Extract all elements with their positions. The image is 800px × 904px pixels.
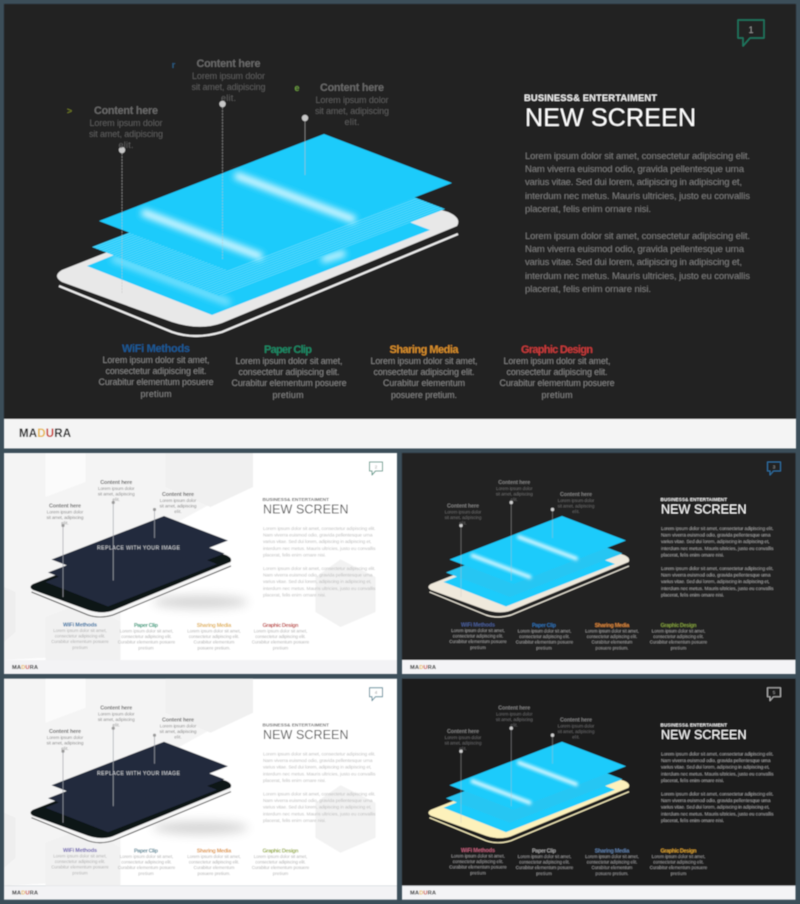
bottom labels: Lorem ipsum dolor sit amet,	[53, 628, 107, 633]
heading and paragraphs: placerat, felis enim ornare nisi.	[661, 778, 724, 784]
phone face	[57, 172, 458, 327]
bottom labels: posuere pretium.	[596, 646, 628, 650]
text block: paragraph 1: varius vitae. Sed dui lorem, adipiscing in adipiscing et,	[525, 177, 742, 188]
heading and paragraphs: interdum nec metus. Mauris ultricies, justo eu convallis	[263, 586, 376, 592]
callout: content here 1: Content here	[94, 105, 158, 117]
callout: content here 1: >	[67, 106, 72, 116]
bottom labels: Curabitur elementum posuere	[118, 865, 176, 870]
callouts: Content here	[560, 718, 592, 724]
phone edge highlight	[59, 234, 458, 336]
heading and paragraphs: placerat, felis enim ornare nisi.	[661, 818, 724, 824]
callout: content here 1: Lorem ipsum dolor	[90, 118, 162, 128]
heading and paragraphs: placerat, felis enim ornare nisi.	[263, 818, 326, 824]
callouts: elit.	[112, 497, 120, 502]
bottom labels: Lorem ipsum dolor sit amet,	[120, 628, 173, 634]
heading and paragraphs: NEW SCREEN	[661, 728, 746, 742]
bottom labels: Paper Clip	[134, 623, 159, 629]
heading and paragraphs: Nam viverra euismod odio, gravida pellentesque urna	[661, 798, 771, 804]
bottom labels: pretium	[138, 646, 154, 650]
bottom labels: Curabitur elementum	[194, 865, 235, 870]
heading and paragraphs: interdum nec metus. Mauris ultricies, justo eu convallis	[661, 546, 774, 552]
heading and paragraphs: NEW SCREEN	[661, 502, 746, 516]
panel: dark slide 5	[402, 679, 796, 900]
text block: paragraph 1: interdum nec metus. Mauris ultricies, justo eu convallis	[525, 191, 750, 202]
heading and paragraphs: placerat, felis enim ornare nisi.	[263, 592, 326, 598]
bottom labels	[51, 848, 310, 876]
heading and paragraphs: Nam viverra euismod odio, gravida pellentesque urna	[263, 572, 373, 578]
bottom labels: pretium	[536, 871, 552, 876]
label: WiFi Methods: Lorem ipsum dolor sit amet,	[102, 355, 210, 365]
heading and paragraphs: interdum nec metus. Mauris ultricies, justo eu convallis	[263, 772, 376, 778]
text block: paragraph 2: varius vitae. Sed dui lorem, adipiscing in adipiscing et,	[525, 257, 742, 268]
bottom labels: pretium	[138, 871, 154, 876]
bottom labels: Lorem ipsum dolor sit amet,	[585, 854, 639, 859]
callout: content here 2: Lorem ipsum dolor	[192, 71, 265, 81]
callout: content here 3: sit amet, adipiscing	[315, 106, 389, 116]
callouts: elit.	[459, 746, 467, 751]
label: Paper Clip: consectetur adipiscing elit.	[238, 367, 340, 377]
label: Graphic Design: consectetur adipiscing elit.	[506, 367, 608, 377]
bottom labels: WiFi Methods	[461, 622, 495, 628]
footer	[4, 886, 397, 900]
bottom labels: Lorem ipsum dolor sit amet,	[254, 628, 307, 634]
heading and paragraphs: interdum nec metus. Mauris ultricies, justo eu convallis	[263, 546, 376, 552]
bottom labels: pretium	[72, 645, 88, 650]
heading and paragraphs	[262, 723, 376, 824]
callouts: sit amet, adipiscing	[558, 729, 595, 734]
label: WiFi Methods: consectetur adipiscing elit.	[106, 366, 206, 376]
heading and paragraphs: Nam viverra euismod odio, gravida pellentesque urna	[661, 572, 771, 578]
icon: comment bubble: 3	[773, 464, 776, 470]
bottom labels: consectetur adipiscing elit.	[255, 634, 306, 639]
text block: paragraph 2	[525, 231, 750, 295]
heading and paragraphs	[660, 497, 774, 598]
heading and paragraphs	[660, 723, 774, 824]
label: Paper Clip: Paper Clip	[264, 344, 312, 356]
heading and paragraphs: Nam viverra euismod odio, gravida pellentesque urna	[661, 532, 771, 538]
icon: comment bubble with number	[738, 20, 764, 46]
icon: comment bubble: 2	[375, 464, 378, 470]
text block: paragraph 2: Lorem ipsum dolor sit amet, consectetur adipiscing elit.	[525, 231, 750, 242]
bottom labels: consectetur adipiscing elit.	[653, 634, 704, 639]
text block: paragraph 1: Nam viverra euismod odio, gravida pellentesque urna	[525, 164, 745, 175]
label: WiFi Methods: WiFi Methods	[122, 343, 190, 355]
callouts: Content here	[447, 729, 479, 735]
bottom labels	[449, 848, 708, 876]
callouts: Content here	[49, 504, 81, 510]
callouts: Content here	[100, 706, 132, 712]
phone illustration	[428, 742, 629, 843]
text block: paragraph 1: Lorem ipsum dolor sit amet, consectetur adipiscing elit.	[525, 151, 750, 162]
bottom labels: Curabitur elementum posuere	[51, 639, 109, 644]
callout: content here 1: sit amet, adipiscing	[89, 129, 163, 139]
callouts: sit amet, adipiscing	[46, 515, 84, 520]
label: Paper Clip: Lorem ipsum dolor sit amet,	[236, 356, 342, 366]
icon: comment bubble: 5	[773, 690, 776, 695]
callouts: sit amet, adipiscing	[98, 492, 135, 496]
heading and paragraphs: varius vitae. Sed dui lorem, adipiscing in adipiscing et,	[661, 765, 770, 771]
callout: content here 2: r	[172, 60, 176, 70]
background hexagons	[4, 679, 376, 886]
bottom labels: consectetur adipiscing elit.	[453, 859, 503, 864]
heading and paragraphs: Lorem ipsum dolor sit amet, consectetur adipiscing elit.	[661, 752, 774, 758]
heading and paragraphs: interdum nec metus. Mauris ultricies, justo eu convallis	[263, 812, 376, 818]
bottom labels: Curabitur elementum posuere	[51, 865, 109, 870]
callouts: Content here	[560, 492, 592, 498]
bottom labels	[51, 622, 310, 650]
bottom labels: WiFi Methods	[63, 848, 97, 854]
callouts: Content here	[447, 504, 479, 510]
panel: dark slide 3	[402, 453, 796, 674]
callouts: sit amet, adipiscing	[444, 741, 482, 746]
callouts: sit amet, adipiscing	[98, 717, 135, 722]
heading and paragraphs: varius vitae. Sed dui lorem, adipiscing in adipiscing et,	[263, 579, 372, 585]
bottom labels: Lorem ipsum dolor sit amet,	[53, 854, 107, 859]
footer	[402, 660, 796, 674]
footer: MADURA	[410, 665, 436, 671]
label: Paper Clip	[232, 344, 347, 400]
callouts: Lorem ipsum dolor	[496, 486, 533, 491]
label: Sharing Media: Lorem ipsum dolor sit amet,	[370, 356, 478, 366]
heading and paragraphs: placerat, felis enim ornare nisi.	[661, 592, 724, 598]
heading and paragraphs: Nam viverra euismod odio, gravida pellentesque urna	[263, 758, 373, 764]
bottom labels: Curabitur elementum posuere	[252, 640, 310, 644]
heading and paragraphs: varius vitae. Sed dui lorem, adipiscing in adipiscing et,	[263, 539, 372, 545]
bottom labels: Graphic Design	[660, 623, 697, 629]
bottom labels: Paper Clip	[134, 849, 159, 855]
bottom labels: pretium	[273, 871, 289, 876]
callouts: sit amet, adipiscing	[496, 717, 533, 722]
footer: MADURA	[410, 891, 436, 897]
callouts: elit.	[459, 520, 467, 526]
bottom labels: posuere pretium.	[198, 646, 230, 650]
phone shadow	[153, 821, 248, 834]
heading: BUSINESS& ENTERTAIMENT	[524, 92, 657, 103]
label: Graphic Design	[500, 344, 615, 400]
label: Paper Clip: pretium	[272, 390, 304, 400]
bottom labels: WiFi Methods	[461, 848, 495, 854]
bottom labels: Lorem ipsum dolor sit amet,	[451, 854, 505, 859]
bottom labels: Sharing Media	[197, 623, 232, 629]
callouts: elit.	[112, 723, 120, 728]
callouts: sit amet, adipiscing	[160, 504, 197, 508]
callouts: elit.	[510, 497, 518, 502]
bottom labels: Sharing Media	[197, 849, 232, 855]
label: Sharing Media: Sharing Media	[390, 344, 459, 356]
phone illustration: REPLACE WITH YOUR IMAGE	[97, 546, 180, 552]
callouts: Lorem ipsum dolor	[558, 724, 595, 729]
heading and paragraphs: placerat, felis enim ornare nisi.	[661, 552, 724, 558]
heading and paragraphs: Nam viverra euismod odio, gravida pellentesque urna	[263, 798, 373, 804]
callouts	[46, 706, 197, 823]
panel: light slide 4	[4, 679, 397, 900]
callouts: Content here	[162, 718, 194, 724]
bottom labels: Lorem ipsum dolor sit amet,	[652, 628, 705, 634]
phone illustration	[428, 516, 629, 617]
callouts: sit amet, adipiscing	[558, 504, 595, 508]
icon: comment bubble	[768, 462, 780, 475]
bottom labels: Curabitur elementum posuere	[252, 865, 310, 870]
callouts: elit.	[510, 723, 518, 728]
heading and paragraphs: BUSINESS& ENTERTAIMENT	[262, 723, 329, 728]
bottom labels: Lorem ipsum dolor sit amet,	[585, 628, 639, 634]
bottom labels: pretium	[536, 646, 552, 650]
callouts: sit amet, adipiscing	[46, 741, 84, 746]
callouts: elit.	[572, 509, 580, 514]
bottom labels: consectetur adipiscing elit.	[55, 634, 105, 638]
callout: content here 3	[294, 82, 389, 175]
heading and paragraphs: varius vitae. Sed dui lorem, adipiscing in adipiscing et,	[263, 765, 372, 771]
heading and paragraphs: varius vitae. Sed dui lorem, adipiscing in adipiscing et,	[661, 805, 770, 811]
bottom labels: Curabitur elementum	[592, 640, 633, 644]
bottom labels: consectetur adipiscing elit.	[255, 860, 306, 865]
callouts: elit.	[572, 735, 580, 740]
callout: content here 3: Content here	[320, 82, 384, 94]
callout: content here 2: Content here	[196, 58, 260, 70]
label: Graphic Design: Graphic Design	[521, 344, 593, 356]
icon: comment bubble	[370, 462, 382, 475]
callout: content here 1: elit.	[118, 140, 134, 150]
heading and paragraphs: interdum nec metus. Mauris ultricies, justo eu convallis	[661, 586, 774, 592]
bottom labels: Paper Clip	[532, 623, 557, 629]
bottom labels: consectetur adipiscing elit.	[189, 860, 239, 865]
bottom labels: Graphic Design	[262, 623, 299, 629]
bottom labels: Curabitur elementum posuere	[516, 865, 574, 870]
callouts: Lorem ipsum dolor	[47, 510, 84, 514]
heading and paragraphs: interdum nec metus. Mauris ultricies, justo eu convallis	[661, 772, 774, 778]
bottom labels: posuere pretium.	[596, 871, 628, 876]
text block: paragraph 1	[525, 151, 750, 215]
bottom labels: pretium	[671, 871, 687, 876]
callout: content here 3: Lorem ipsum dolor	[316, 95, 388, 105]
bottom labels: consectetur adipiscing elit.	[453, 634, 503, 638]
heading and paragraphs: varius vitae. Sed dui lorem, adipiscing in adipiscing et,	[263, 805, 372, 811]
bottom screen layer	[87, 180, 430, 315]
bottom labels: Paper Clip	[532, 849, 557, 855]
label: Sharing Media: consectetur adipiscing elit.	[374, 367, 474, 377]
text block: paragraph 1: placerat, felis enim ornare nisi.	[525, 204, 651, 215]
heading and paragraphs: varius vitae. Sed dui lorem, adipiscing in adipiscing et,	[661, 579, 770, 585]
bottom labels: Sharing Media	[595, 849, 630, 855]
heading and paragraphs: BUSINESS& ENTERTAIMENT	[262, 497, 329, 502]
heading and paragraphs	[262, 497, 376, 598]
heading and paragraphs: placerat, felis enim ornare nisi.	[263, 552, 326, 558]
callouts: Lorem ipsum dolor	[160, 724, 197, 729]
bottom labels: Lorem ipsum dolor sit amet,	[451, 628, 505, 633]
callouts	[46, 480, 197, 597]
callouts: elit.	[61, 520, 69, 526]
bottom labels: pretium	[470, 871, 486, 876]
bottom labels: Curabitur elementum posuere	[650, 865, 708, 870]
bottom labels: Lorem ipsum dolor sit amet,	[120, 854, 173, 859]
heading and paragraphs: varius vitae. Sed dui lorem, adipiscing in adipiscing et,	[661, 539, 770, 545]
bottom labels: Graphic Design	[660, 849, 697, 855]
callout: content here 2	[172, 58, 266, 260]
heading and paragraphs: Lorem ipsum dolor sit amet, consectetur adipiscing elit.	[661, 526, 774, 532]
icon: comment bubble: 4	[375, 690, 378, 695]
callouts: Content here	[100, 480, 132, 486]
bottom labels: posuere pretium.	[198, 871, 230, 876]
callouts: Lorem ipsum dolor	[445, 735, 482, 740]
callouts: Lorem ipsum dolor	[160, 498, 197, 503]
footer bar	[4, 419, 796, 448]
panel: light slide 2	[4, 453, 397, 674]
label: WiFi Methods: Curabitur elementum posuere	[98, 377, 214, 387]
callouts: sit amet, adipiscing	[444, 515, 482, 520]
background hexagons	[4, 453, 376, 660]
callout: content here 2: sit amet, adipiscing	[192, 82, 266, 92]
panel: main dark slide	[4, 4, 796, 448]
top screen layer	[99, 134, 452, 270]
callouts: Lorem ipsum dolor	[98, 486, 135, 491]
callouts: Lorem ipsum dolor	[558, 498, 595, 503]
bottom labels: consectetur adipiscing elit.	[653, 860, 704, 865]
heading and paragraphs: NEW SCREEN	[263, 502, 348, 516]
bottom labels: WiFi Methods	[63, 622, 97, 628]
footer	[402, 886, 796, 900]
callouts: Lorem ipsum dolor	[496, 712, 533, 717]
bottom labels: Curabitur elementum posuere	[449, 639, 507, 644]
label: WiFi Methods	[98, 343, 214, 399]
bottom labels: pretium	[671, 646, 687, 650]
bottom labels: Lorem ipsum dolor sit amet,	[187, 854, 241, 859]
bottom labels	[449, 622, 708, 650]
callouts: elit.	[174, 509, 182, 514]
heading and paragraphs: Nam viverra euismod odio, gravida pellentesque urna	[263, 532, 373, 538]
callouts: Content here	[498, 480, 530, 486]
icon: comment bubble	[370, 688, 382, 701]
phone illustration	[57, 134, 458, 336]
callouts: Content here	[162, 492, 194, 498]
phone illustration	[30, 516, 231, 617]
bottom labels: Curabitur elementum posuere	[118, 640, 176, 644]
callouts: Lorem ipsum dolor	[445, 510, 482, 514]
callouts: elit.	[61, 746, 69, 751]
text block: paragraph 2: placerat, felis enim ornare nisi.	[525, 284, 651, 295]
label: Graphic Design: pretium	[542, 390, 572, 400]
bottom labels: pretium	[72, 871, 88, 876]
callouts: elit.	[174, 735, 182, 740]
bottom labels: Curabitur elementum posuere	[449, 865, 507, 870]
label: Sharing Media	[370, 344, 478, 400]
bottom labels: pretium	[470, 645, 486, 650]
bottom labels: Graphic Design	[262, 849, 299, 855]
bottom labels: Lorem ipsum dolor sit amet,	[652, 854, 705, 859]
phone illustration	[30, 742, 231, 843]
bottom labels: Curabitur elementum	[194, 640, 235, 644]
callouts	[444, 480, 595, 597]
callouts: Content here	[498, 706, 530, 712]
heading and paragraphs: Lorem ipsum dolor sit amet, consectetur adipiscing elit.	[263, 792, 376, 798]
phone shadow	[153, 596, 248, 608]
callout: content here 3: elit.	[344, 117, 360, 127]
bottom labels: Lorem ipsum dolor sit amet,	[254, 854, 307, 859]
bottom labels: Curabitur elementum	[592, 865, 633, 870]
callouts	[444, 706, 595, 823]
bottom labels: consectetur adipiscing elit.	[55, 859, 105, 864]
heading and paragraphs: BUSINESS& ENTERTAIMENT	[660, 723, 727, 728]
callouts: Lorem ipsum dolor	[47, 735, 84, 740]
heading and paragraphs: Lorem ipsum dolor sit amet, consectetur adipiscing elit.	[661, 792, 774, 798]
bottom labels: consectetur adipiscing elit.	[189, 634, 239, 639]
phone illustration: REPLACE WITH YOUR IMAGE	[97, 771, 180, 777]
label: Sharing Media: posuere pretium.	[391, 390, 457, 400]
middle screen layer	[92, 160, 445, 296]
heading and paragraphs: Lorem ipsum dolor sit amet, consectetur adipiscing elit.	[661, 566, 774, 572]
footer: MADURA	[12, 891, 38, 897]
bottom labels: Lorem ipsum dolor sit amet,	[518, 854, 571, 859]
footer: MADURA	[12, 665, 38, 671]
bottom labels: pretium	[273, 646, 289, 650]
logo: MADURA: MADURA	[19, 428, 71, 440]
bottom labels: consectetur adipiscing elit.	[587, 860, 637, 865]
bottom labels: Lorem ipsum dolor sit amet,	[187, 628, 241, 634]
highlight stripes	[142, 212, 262, 257]
heading and paragraphs: interdum nec metus. Mauris ultricies, justo eu convallis	[661, 812, 774, 818]
icon: comment bubble	[768, 688, 780, 701]
callout: content here 1	[67, 105, 163, 293]
heading and paragraphs: Lorem ipsum dolor sit amet, consectetur adipiscing elit.	[263, 752, 376, 758]
label: Sharing Media: Curabitur elementum	[383, 378, 465, 388]
heading: NEW SCREEN	[525, 104, 696, 132]
callout: content here 2: elit.	[221, 93, 236, 103]
bottom labels: Sharing Media	[595, 623, 630, 629]
callouts: Content here	[49, 729, 81, 735]
bottom labels: consectetur adipiscing elit.	[519, 860, 570, 865]
bottom labels: consectetur adipiscing elit.	[121, 634, 172, 639]
bottom labels: Curabitur elementum posuere	[650, 640, 708, 644]
label: Paper Clip: Curabitur elementum posuere	[232, 378, 347, 388]
label: Graphic Design: Lorem ipsum dolor sit amet,	[504, 356, 610, 366]
bottom labels: consectetur adipiscing elit.	[121, 860, 172, 865]
heading and paragraphs: BUSINESS& ENTERTAIMENT	[660, 497, 727, 502]
label: WiFi Methods: pretium	[140, 389, 172, 399]
callouts: Lorem ipsum dolor	[98, 712, 135, 717]
callouts: sit amet, adipiscing	[496, 492, 533, 496]
heading	[524, 92, 696, 132]
bottom labels: Lorem ipsum dolor sit amet,	[518, 628, 571, 634]
heading and paragraphs: Lorem ipsum dolor sit amet, consectetur adipiscing elit.	[263, 526, 376, 532]
icon: comment bubble with number: 1	[748, 25, 754, 35]
callout: content here 3: e	[294, 83, 300, 93]
heading and paragraphs: placerat, felis enim ornare nisi.	[263, 778, 326, 784]
label: Graphic Design: Curabitur elementum posuere	[500, 378, 615, 388]
callouts: sit amet, adipiscing	[160, 729, 197, 734]
bottom labels: consectetur adipiscing elit.	[587, 634, 637, 639]
heading and paragraphs: Nam viverra euismod odio, gravida pellentesque urna	[661, 758, 771, 764]
text block: paragraph 2: Nam viverra euismod odio, gravida pellentesque urna	[525, 244, 745, 255]
footer	[4, 660, 397, 674]
heading and paragraphs: Lorem ipsum dolor sit amet, consectetur adipiscing elit.	[263, 566, 376, 572]
bottom labels: Curabitur elementum posuere	[516, 640, 574, 644]
text block: paragraph 2: interdum nec metus. Mauris ultricies, justo eu convallis	[525, 271, 750, 282]
heading and paragraphs: NEW SCREEN	[263, 728, 348, 742]
bottom labels: consectetur adipiscing elit.	[519, 634, 570, 639]
